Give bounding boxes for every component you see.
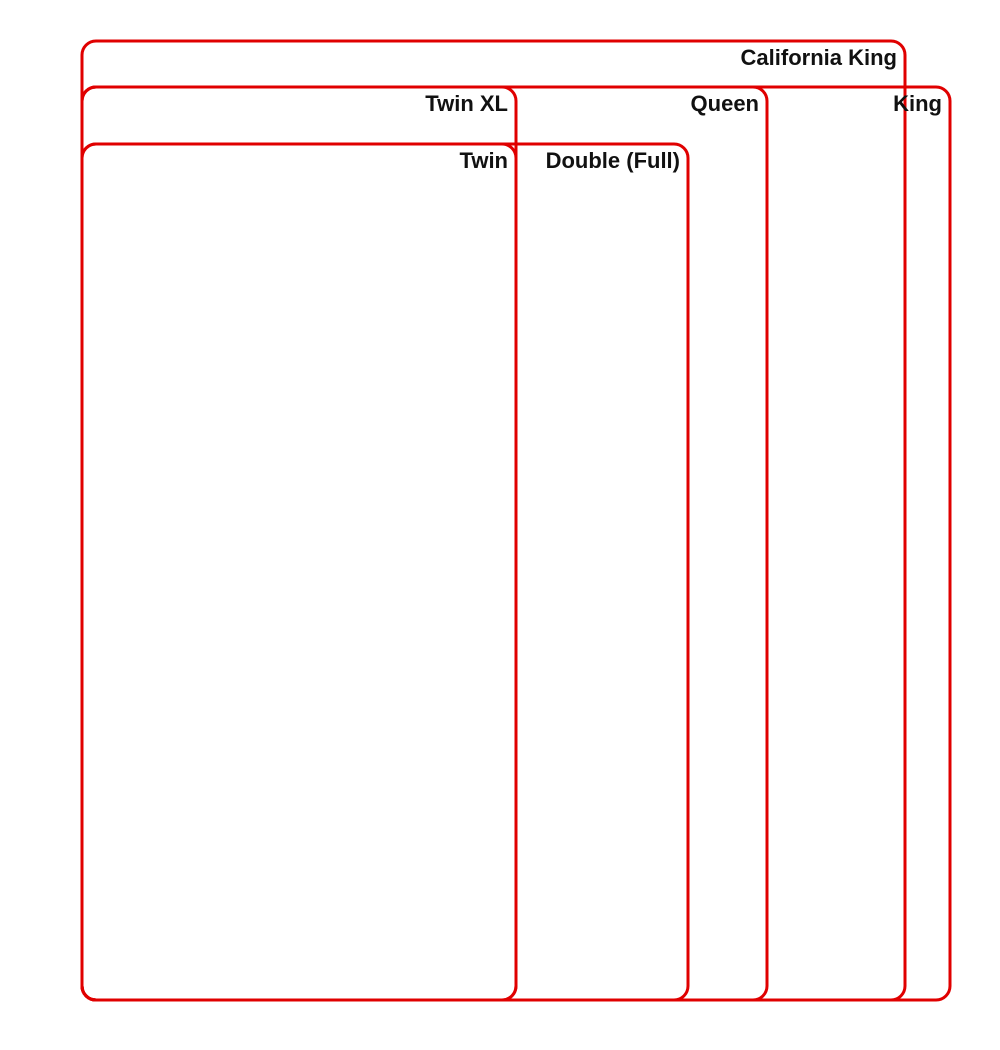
rect: California King: California King bbox=[741, 45, 897, 70]
rect: Double (Full): Double (Full) bbox=[546, 148, 680, 173]
rect: Queen: Queen bbox=[691, 91, 759, 116]
rect: King: King bbox=[893, 91, 942, 116]
rect: Twin XL: Twin XL bbox=[425, 91, 508, 116]
rect: Twin: Twin bbox=[460, 148, 508, 173]
